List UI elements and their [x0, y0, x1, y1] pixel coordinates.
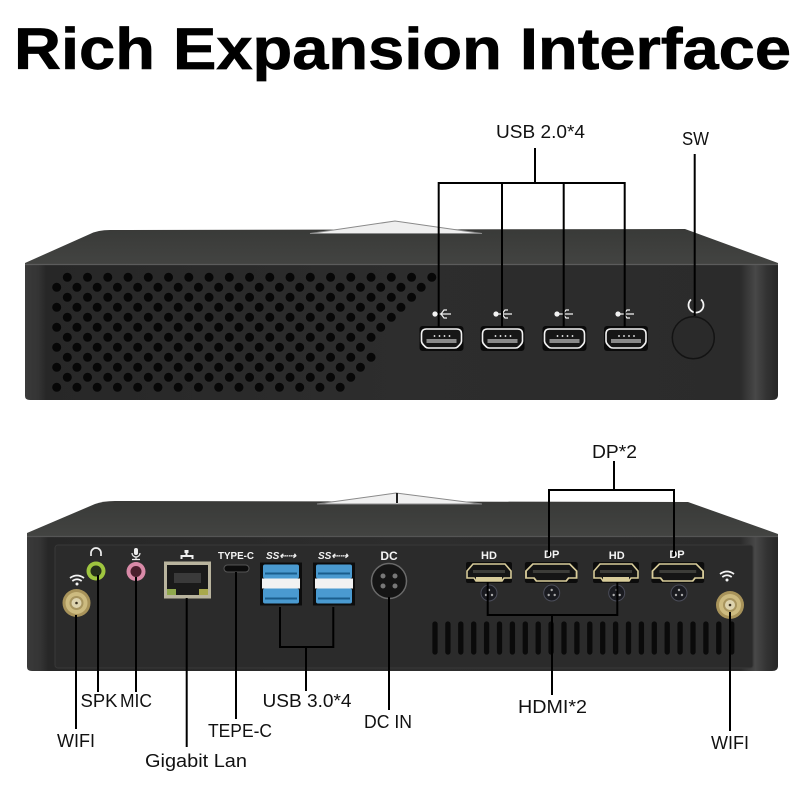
callout: MIC: MIC [120, 691, 152, 711]
front face [25, 265, 778, 400]
title: Rich Expansion Interface [14, 17, 791, 82]
callout: SPK [80, 575, 118, 711]
callout: right WiFi: WIFI [711, 733, 749, 753]
honeycomb vent [57, 277, 432, 387]
mic jack [126, 548, 146, 581]
right WiFi antenna connector [716, 572, 744, 619]
top surface [25, 229, 778, 266]
callout: DP: DP*2 [592, 442, 637, 462]
silver top wedge [317, 493, 482, 504]
callout: SPK: SPK [80, 691, 118, 711]
callout: HDMI: HDMI*2 [518, 697, 587, 717]
USB 3.0 ports: SS⇠⇢ [266, 551, 297, 562]
callout: DC IN [364, 597, 412, 732]
callout: USB 2.0 [439, 122, 625, 327]
speaker jack [86, 548, 106, 580]
callout: Gigabit Lan: Gigabit Lan [145, 751, 247, 771]
callout: DC IN: DC IN [364, 712, 412, 732]
HDMI port 2 [593, 550, 639, 601]
Type-C port [218, 550, 254, 572]
power button [672, 317, 714, 359]
callout: USB 3.0: USB 3.0*4 [262, 691, 352, 711]
HDMI port 2: HD [609, 550, 625, 562]
Type-C port: TYPE-C [218, 550, 254, 562]
DP port 2 [651, 549, 704, 601]
callout: SW: SW [682, 129, 709, 149]
USB 2.0 ports [420, 310, 648, 351]
callout: MIC [120, 577, 152, 711]
DP port 1 [525, 549, 578, 601]
callout: left WiFi: WIFI [57, 731, 95, 751]
callout: Type-C: TEPE-C [208, 721, 272, 741]
silver top wedge [310, 221, 482, 234]
panel: front view of mini PC [25, 221, 778, 400]
USB 3.0 ports [260, 551, 355, 606]
rear face [27, 537, 778, 671]
DP port 2: DP [669, 549, 685, 561]
HDMI port 1 [466, 550, 512, 601]
callout: HDMI [488, 582, 617, 717]
DP port 1: DP [544, 549, 559, 561]
DC power jack [372, 549, 406, 598]
callout: USB 3.0 [262, 607, 352, 711]
HDMI port 1: HD [481, 550, 497, 562]
callout: left WiFi [57, 615, 95, 751]
slot vent [435, 624, 732, 652]
power icon [688, 300, 703, 313]
panel: rear view of mini PC [27, 493, 778, 671]
callout: USB 2.0: USB 2.0*4 [496, 122, 585, 142]
USB 3.0 ports: SS⇠⇢ [318, 551, 349, 562]
top surface [27, 501, 778, 538]
left WiFi antenna connector [62, 576, 90, 617]
callout: DP [549, 442, 674, 556]
DC power jack: DC [380, 549, 398, 563]
gigabit LAN port [164, 550, 211, 598]
